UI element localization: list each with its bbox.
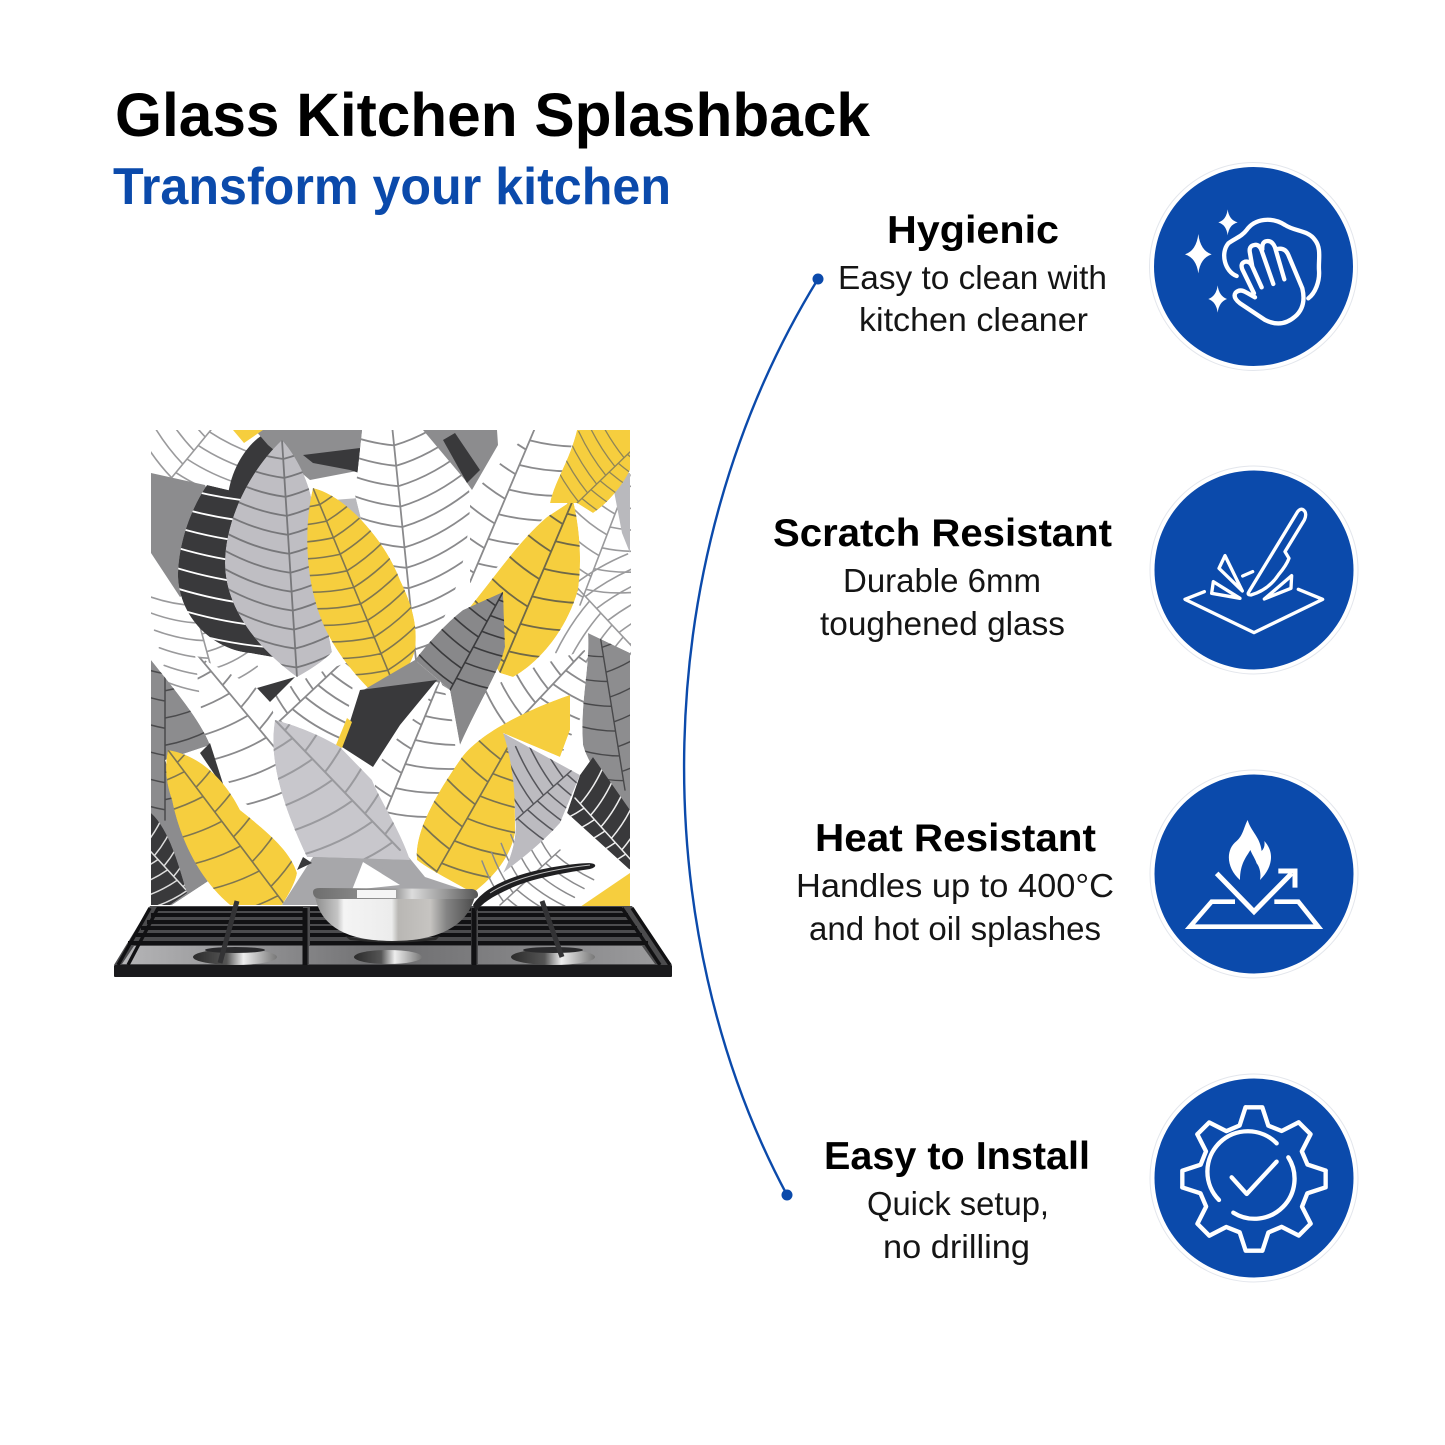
heading: Scratch Resistant xyxy=(773,512,1112,555)
gas cooktop xyxy=(114,901,672,977)
grates xyxy=(118,901,670,965)
white leaf right of centre xyxy=(375,680,456,818)
feature: hygienic xyxy=(838,209,1107,338)
description: kitchen cleaner xyxy=(859,301,1088,338)
hob surface xyxy=(114,906,672,965)
light grey leaf right xyxy=(474,726,612,873)
dark triangle under grey leaf xyxy=(257,677,295,702)
icon: flame on surface xyxy=(1150,770,1358,978)
pan handle xyxy=(473,863,595,912)
feature: scratch resistant xyxy=(773,512,1112,642)
dark wedge top xyxy=(443,433,480,483)
white triangle bottom left xyxy=(172,882,208,905)
white leaf right lower xyxy=(486,650,586,751)
grey leaf centre xyxy=(416,592,505,744)
white leaf mid left xyxy=(151,596,258,692)
pan rim xyxy=(313,888,478,899)
hob front edge xyxy=(114,965,672,977)
yellow sliver centre xyxy=(336,718,352,748)
description: Quick setup, xyxy=(867,1185,1049,1222)
description: and hot oil splashes xyxy=(809,910,1101,947)
icon: hand wiping with sparkles xyxy=(1150,162,1358,370)
frying pan xyxy=(313,863,595,942)
yellow leaf right xyxy=(470,503,580,677)
yellow corner bottom right xyxy=(580,873,630,907)
description: Easy to clean with xyxy=(838,259,1107,296)
white leaf lower left xyxy=(195,656,282,805)
yellow leaf lower centre xyxy=(367,694,582,918)
white triangle behind pan xyxy=(352,862,400,890)
yellow leaf top right xyxy=(550,430,630,513)
dark patch top xyxy=(303,448,360,472)
description xyxy=(820,562,1065,642)
white fern right xyxy=(567,474,631,606)
dark leaf xyxy=(178,485,273,657)
heading: Easy to Install xyxy=(824,1135,1090,1178)
light grey behind yellow leaf xyxy=(338,498,362,520)
icon: knife scratching glass xyxy=(1150,466,1358,674)
grey top band xyxy=(255,430,362,480)
description xyxy=(796,867,1114,947)
description xyxy=(838,259,1107,338)
burners xyxy=(193,947,595,965)
description: Handles up to 400°C xyxy=(796,867,1114,904)
handle highlight xyxy=(490,865,590,893)
grey band behind pan right xyxy=(404,858,461,889)
glass zones xyxy=(122,946,655,964)
grey area behind pan xyxy=(282,857,399,905)
description: toughened glass xyxy=(820,605,1065,642)
grey leaf left xyxy=(151,473,206,597)
pan base shadow xyxy=(345,936,440,942)
connector curve with end dots xyxy=(684,274,824,1200)
dark leaf back xyxy=(228,436,273,494)
dark patch centre xyxy=(342,680,437,767)
yellow leaf lower left xyxy=(166,750,297,905)
white leaf top left xyxy=(151,430,246,483)
grey band centre xyxy=(364,660,450,690)
feature: heat resistant xyxy=(796,817,1114,947)
icon: gear with check mark xyxy=(1150,1074,1358,1282)
rim highlights xyxy=(357,890,396,898)
heading: Hygienic xyxy=(887,209,1059,252)
description: Durable 6mm xyxy=(843,562,1041,599)
white centre leaf xyxy=(355,430,470,662)
light grey strip right xyxy=(614,472,630,553)
description xyxy=(867,1185,1049,1265)
dark triangle left xyxy=(200,743,224,784)
white leaf small centre xyxy=(272,663,352,738)
heading: Heat Resistant xyxy=(815,817,1096,860)
light grey leaf xyxy=(225,440,332,677)
white fern lower right xyxy=(555,553,631,664)
light grey leaf centre xyxy=(274,720,410,860)
description: no drilling xyxy=(883,1228,1030,1265)
dark leaf right xyxy=(538,757,674,900)
white leaf top right xyxy=(470,430,572,583)
white leaf bottom right xyxy=(470,814,594,938)
yellow sliver top xyxy=(233,430,263,443)
grey wedge top xyxy=(423,430,498,490)
product image: leaf splashback panel xyxy=(151,430,631,906)
dark leaf lower left xyxy=(151,813,187,905)
title: Glass Kitchen Splashback xyxy=(115,81,870,149)
grey leaf left lower xyxy=(151,660,210,905)
feature: easy to install xyxy=(824,1135,1090,1265)
yellow leaf upper xyxy=(307,488,416,688)
subtitle: Transform your kitchen xyxy=(113,158,671,216)
pan body xyxy=(315,896,475,941)
dark triangle centre bottom xyxy=(297,857,312,870)
grey leaf right xyxy=(544,617,680,810)
